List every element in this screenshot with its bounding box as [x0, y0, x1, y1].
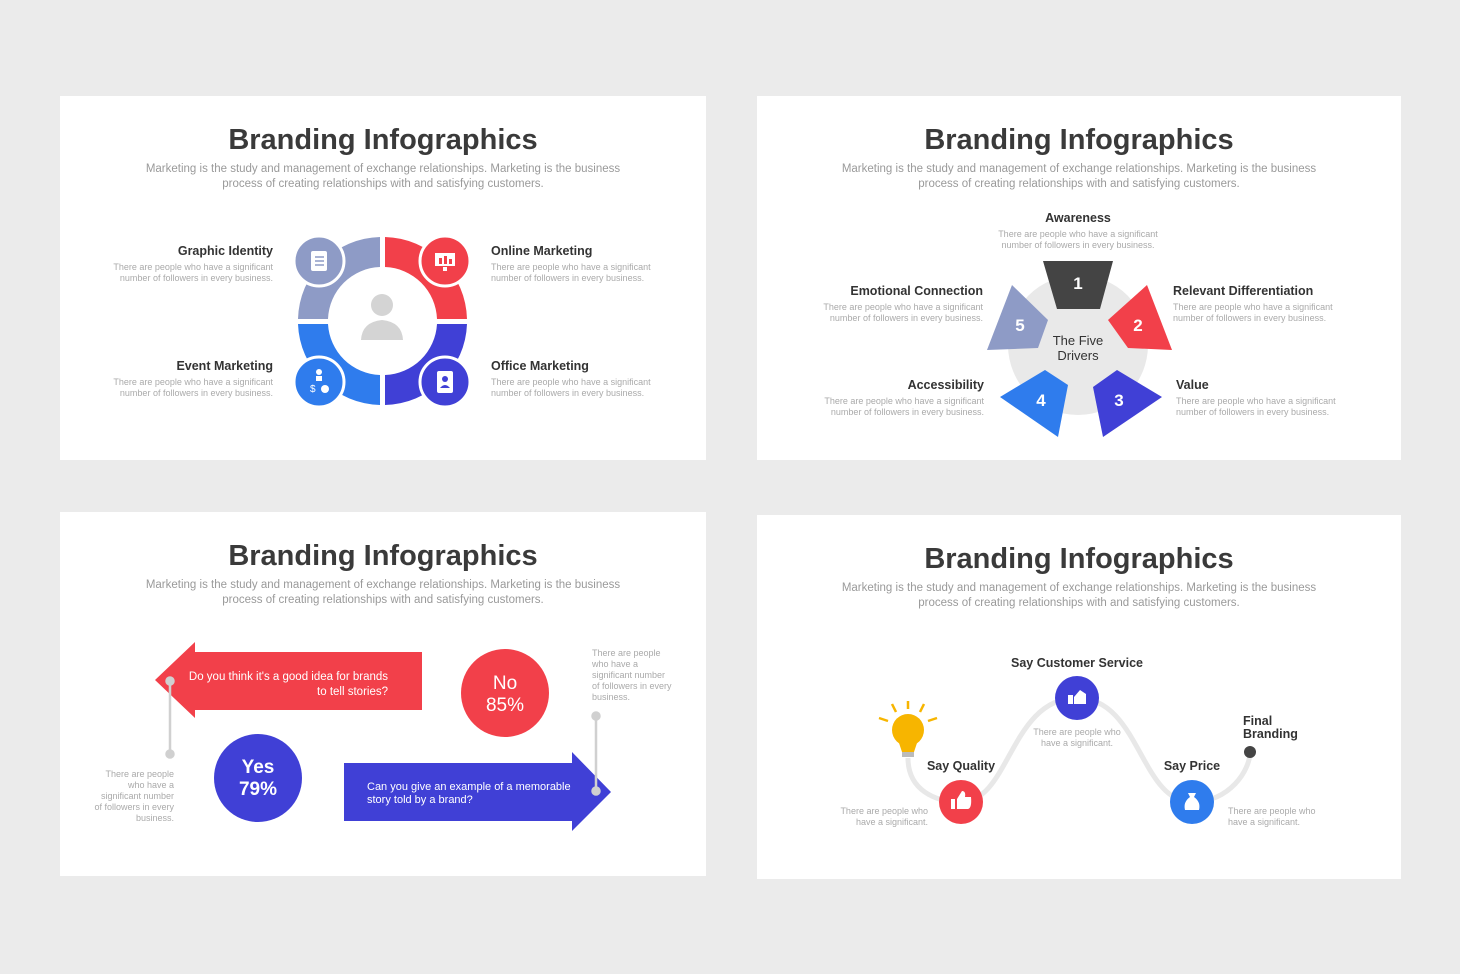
node: Final Branding: [1243, 714, 1298, 758]
label: Graphic Identity: There are people who have a significant: [113, 262, 273, 272]
subtitle: Marketing is the study and management of exchange relationships. Marketing is the business: [842, 163, 1316, 175]
center circle: The Five: [1053, 333, 1103, 348]
driver 4: [1000, 370, 1068, 437]
label: Office Marketing: There are people who have a significant: [491, 377, 651, 387]
arrow: red question: Do you think it's a good idea for brands: [189, 671, 388, 683]
label: Event Marketing: Event Marketing: [176, 359, 273, 373]
circle: Yes 79%: Yes: [242, 757, 274, 778]
node: Final Branding: Branding: [1243, 727, 1298, 741]
driver 1: 1: [1073, 274, 1083, 293]
node: Final Branding: Final: [1243, 714, 1272, 728]
driver 2: [1108, 285, 1172, 350]
circle: No 85%: 85%: [486, 695, 524, 716]
label: Office Marketing: number of followers in every business.: [491, 388, 644, 398]
label: Online Marketing: number of followers in every business.: [491, 273, 644, 283]
icon: contact book: [420, 357, 470, 407]
arrow: blue question: story told by a brand?: [367, 794, 473, 806]
center circle: [1008, 275, 1148, 415]
circle: Yes 79%: [214, 734, 302, 822]
circle: Yes 79%: 79%: [239, 779, 277, 800]
text: price note: have a significant.: [1228, 817, 1300, 827]
label: Accessibility: There are people who have a significant: [824, 396, 984, 406]
subtitle: [842, 163, 1316, 190]
label: Value: [1176, 378, 1336, 417]
text: price note: [1228, 806, 1316, 827]
label: Awareness: Awareness: [1045, 211, 1111, 225]
icon: person: [361, 294, 403, 340]
arrow: blue question: [344, 752, 611, 831]
label: Accessibility: [824, 378, 984, 417]
driver 3: 3: [1114, 391, 1124, 410]
text: service note: have a significant.: [1041, 738, 1113, 748]
label: Value: number of followers in every business.: [1176, 407, 1329, 417]
label: Awareness: [998, 211, 1158, 250]
label: Accessibility: number of followers in every business.: [831, 407, 984, 417]
label: Relevant Differentiation: There are people who have a significant: [1173, 302, 1333, 312]
text: left note: business.: [136, 813, 174, 823]
label: Office Marketing: [491, 359, 651, 398]
subtitle: [146, 163, 620, 190]
label: Graphic Identity: Graphic Identity: [178, 244, 273, 258]
label: Accessibility: Accessibility: [908, 378, 984, 392]
subtitle: process of creating relationships with and satisfying customers.: [918, 597, 1240, 609]
label: Relevant Differentiation: Relevant Differentiation: [1173, 284, 1313, 298]
text: quality note: There are people who: [840, 806, 928, 816]
subtitle: process of creating relationships with and satisfying customers.: [918, 178, 1240, 190]
text: left note: of followers in every: [94, 802, 174, 812]
driver 1: [1043, 261, 1113, 309]
title: Branding Infographics: [228, 540, 538, 572]
driver 5: [987, 285, 1048, 350]
driver 2: 2: [1133, 316, 1143, 335]
label: Awareness: number of followers in every business.: [1001, 240, 1155, 250]
center circle: Drivers: [1057, 348, 1099, 363]
label: Online Marketing: [491, 244, 651, 283]
text: left note: who have a: [127, 780, 174, 790]
label: Event Marketing: [113, 359, 273, 398]
node: Say Quality: Say Quality: [927, 759, 995, 773]
arrow: red question: [155, 642, 422, 718]
text: right note: business.: [592, 692, 630, 702]
subtitle: [146, 579, 620, 606]
ring chart: [294, 236, 470, 407]
icon: clipboard: [294, 236, 344, 286]
text: left note: [94, 769, 174, 823]
text: left note: significant number: [101, 791, 174, 801]
arrow: red question: to tell stories?: [317, 686, 388, 698]
label: Value: Value: [1176, 378, 1209, 392]
icon: monitor: [420, 236, 470, 286]
subtitle: process of creating relationships with and satisfying customers.: [222, 594, 544, 606]
subtitle: process of creating relationships with and satisfying customers.: [222, 178, 544, 190]
driver 5: 5: [1015, 316, 1025, 335]
arrow: blue question: Can you give an example of a memorable: [367, 781, 571, 793]
text: price note: There are people who: [1228, 806, 1316, 816]
title: Branding Infographics: [924, 124, 1234, 156]
label: Graphic Identity: number of followers in every business.: [120, 273, 273, 283]
label: Relevant Differentiation: [1173, 284, 1333, 323]
title: Branding Infographics: [924, 543, 1234, 575]
label: Emotional Connection: number of followers in every business.: [830, 313, 983, 323]
panel: five drivers: [757, 96, 1401, 460]
circle: No 85%: No: [493, 673, 517, 694]
label: Online Marketing: There are people who have a significant: [491, 262, 651, 272]
subtitle: Marketing is the study and management of exchange relationships. Marketing is the business: [146, 579, 620, 591]
circle: No 85%: [461, 649, 549, 737]
label: Office Marketing: Office Marketing: [491, 359, 589, 373]
text: service note: There are people who: [1033, 727, 1121, 737]
label: Online Marketing: Online Marketing: [491, 244, 592, 258]
icon: finance person: $: [310, 384, 316, 395]
text: service note: [1033, 727, 1121, 748]
label: Value: There are people who have a significant: [1176, 396, 1336, 406]
subtitle: [842, 582, 1316, 609]
label: Event Marketing: number of followers in every business.: [120, 388, 273, 398]
callout line left: [166, 678, 174, 758]
subtitle: Marketing is the study and management of exchange relationships. Marketing is the business: [146, 163, 620, 175]
subtitle: Marketing is the study and management of exchange relationships. Marketing is the business: [842, 582, 1316, 594]
wave path: [908, 698, 1250, 802]
text: right note: significant number: [592, 670, 665, 680]
label: Event Marketing: There are people who have a significant: [113, 377, 273, 387]
callout line right: [592, 712, 600, 794]
text: quality note: have a significant.: [856, 817, 928, 827]
node: Say Quality: [927, 759, 995, 824]
label: Emotional Connection: There are people who have a significant: [823, 302, 983, 312]
node: Say Customer Service: Say Customer Service: [1011, 656, 1143, 670]
text: right note: There are people: [592, 648, 661, 658]
label: Graphic Identity: [113, 244, 273, 283]
text: left note: There are people: [105, 769, 174, 779]
text: right note: [591, 648, 672, 702]
node: Say Customer Service: [1011, 656, 1143, 720]
icon: finance person: [294, 357, 344, 407]
text: right note: who have a: [591, 659, 638, 669]
label: Emotional Connection: Emotional Connection: [850, 284, 983, 298]
panel: ring: [60, 96, 706, 460]
title: Branding Infographics: [228, 124, 538, 156]
panel: path: [757, 515, 1401, 879]
label: Relevant Differentiation: number of followers in every business.: [1173, 313, 1326, 323]
panel: arrows poll: [60, 512, 706, 876]
node: Say Price: Say Price: [1164, 759, 1220, 773]
text: quality note: [840, 806, 928, 827]
driver 4: 4: [1036, 391, 1046, 410]
driver 3: [1093, 370, 1162, 437]
icon: light bulb: [879, 701, 937, 757]
label: Awareness: There are people who have a significant: [998, 229, 1158, 239]
node: Say Price: [1164, 759, 1220, 824]
label: Emotional Connection: [823, 284, 983, 323]
text: right note: of followers in every: [592, 681, 672, 691]
